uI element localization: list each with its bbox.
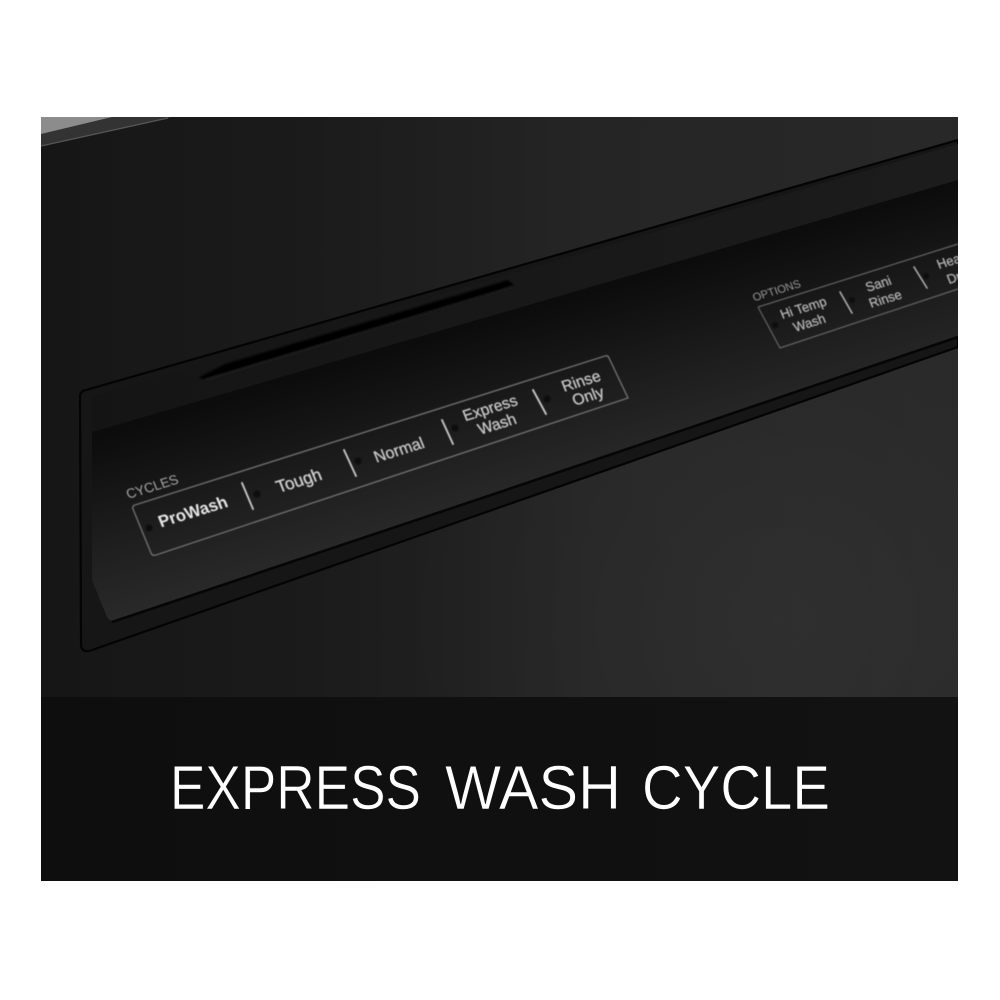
cycle indicator lights	[146, 396, 550, 532]
cycles group	[124, 356, 628, 555]
handle slot	[198, 280, 514, 380]
cycle: Tough: Tough	[273, 464, 325, 497]
caption title: WASH	[445, 754, 621, 823]
options label: OPTIONS	[751, 278, 803, 304]
option separators	[840, 267, 927, 313]
cycle: Express Wash: Express	[460, 392, 520, 425]
cycles label: CYCLES	[124, 472, 181, 502]
option: Heated Dry: Dry	[944, 267, 970, 287]
option: Sani Rinse: Rinse	[867, 287, 904, 311]
cycle: Express Wash	[462, 396, 518, 434]
cycle: Rinse Only: Rinse	[559, 368, 604, 396]
cycle: ProWash: ProWash	[155, 492, 231, 531]
cycle: Rinse Only: Only	[570, 384, 607, 409]
caption title: EXPRESS	[170, 754, 421, 823]
options group	[751, 244, 980, 348]
option: Hi Temp Wash: Wash	[791, 311, 828, 335]
caption title: CYCLE	[642, 754, 830, 823]
option indicator lights	[772, 273, 929, 328]
cycle separators	[242, 390, 546, 509]
door background	[41, 117, 958, 697]
caption band	[41, 697, 958, 881]
option: Sani Rinse	[865, 274, 902, 308]
cycle: Normal: Normal	[371, 434, 427, 466]
panel face	[92, 180, 958, 621]
cycle: Express Wash: Wash	[475, 411, 519, 439]
upper lip of the panel	[956, 144, 958, 180]
option: Hi Temp Wash: Hi Temp	[778, 294, 829, 322]
option: Hi Temp Wash	[779, 298, 828, 332]
cycle: Rinse Only	[560, 372, 604, 406]
control panel recess	[80, 140, 958, 651]
option: Heated Dry	[936, 255, 958, 284]
option: Heated Dry: Heated	[934, 245, 980, 272]
top edge of the door	[41, 117, 172, 146]
infographic: dishwasher control panel photo with caption	[41, 117, 958, 881]
panel face lower shadow line	[112, 337, 958, 622]
cycles outline box	[133, 356, 628, 555]
option: Sani Rinse: Sani	[863, 273, 894, 295]
options outline box	[758, 244, 958, 348]
caption title	[170, 754, 830, 823]
photo: dishwasher door	[41, 117, 980, 881]
